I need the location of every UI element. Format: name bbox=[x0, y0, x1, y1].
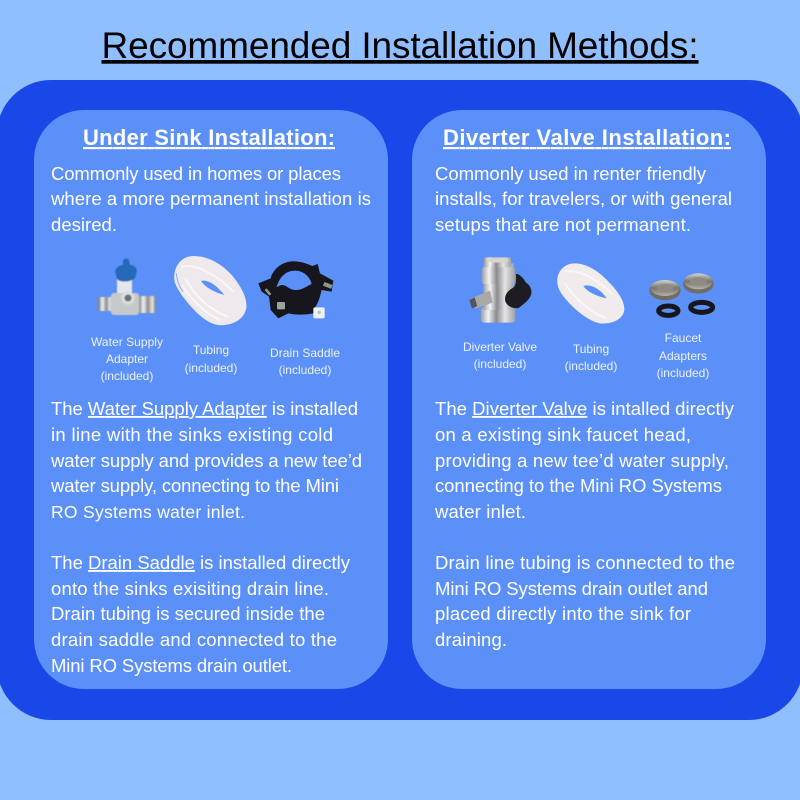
heading: diverter valve: Diverter Valve Installation: bbox=[443, 125, 731, 150]
icon: faucet adapters bbox=[649, 273, 714, 315]
body text: diverter valve: The Diverter Valve is intalled directly bbox=[435, 398, 735, 419]
body text: water supply adapter: The Water Supply Adapter is installed bbox=[51, 398, 358, 419]
body text: water supply adapter: RO Systems water inlet. bbox=[51, 502, 245, 522]
icon: drain saddle bbox=[258, 261, 333, 318]
body text: drain saddle: drain saddle and connected to the bbox=[51, 629, 337, 650]
intro text: under sink bbox=[50, 163, 371, 235]
icon: diverter valve bbox=[469, 257, 531, 323]
captions: diverter parts bbox=[463, 331, 709, 380]
captions: under sink parts: (included) bbox=[185, 361, 237, 375]
body text: water supply adapter bbox=[50, 398, 362, 522]
captions: diverter parts: Adapters bbox=[659, 349, 707, 363]
captions: diverter parts: (included) bbox=[474, 357, 526, 371]
captions: under sink parts: (included) bbox=[279, 363, 331, 377]
captions: diverter parts: (included) bbox=[565, 359, 617, 373]
captions: under sink parts bbox=[91, 335, 340, 383]
body text: drain saddle: onto the sinks exisiting drain line. bbox=[51, 578, 329, 599]
body text: diverter valve: on a existing sink faucet head, bbox=[435, 424, 691, 445]
body text: water supply adapter: in line with the sinks existing cold bbox=[51, 424, 333, 445]
body text: drain line: placed directly into the sink for bbox=[435, 603, 691, 624]
captions: diverter parts: Diverter Valve bbox=[463, 340, 537, 354]
body text: drain line bbox=[435, 552, 735, 650]
body text: drain saddle bbox=[51, 552, 351, 676]
intro text: diverter valve: Commonly used in renter friendly bbox=[435, 163, 707, 184]
captions: under sink parts: Water Supply bbox=[91, 335, 163, 349]
title: Recommended Installation Methods: bbox=[102, 25, 698, 66]
body text: drain line: Drain line tubing is connected to the bbox=[435, 552, 735, 573]
intro text: diverter valve: installs, for travelers, or with general bbox=[435, 188, 732, 209]
captions: under sink parts: Tubing bbox=[193, 343, 229, 357]
captions: diverter parts: Faucet bbox=[665, 331, 702, 345]
icon: water supply adapter bbox=[98, 258, 156, 315]
body text: drain saddle: The Drain Saddle is installed directly bbox=[51, 552, 351, 573]
body text: diverter valve: water inlet. bbox=[434, 501, 526, 522]
intro text: diverter valve bbox=[435, 163, 732, 235]
heading: under sink: Under Sink Installation: bbox=[83, 125, 335, 150]
icon: tubing coil bbox=[557, 263, 624, 323]
body text: drain saddle: Drain tubing is secured inside the bbox=[51, 603, 325, 624]
body text: diverter valve: providing a new tee’d water supply, bbox=[435, 450, 729, 471]
body text: diverter valve: connecting to the Mini RO Systems bbox=[435, 475, 722, 496]
panel: diverter valve installation bbox=[412, 110, 766, 689]
captions: diverter parts: (included) bbox=[657, 366, 709, 380]
outer blue panel bbox=[0, 80, 800, 720]
intro text: under sink: where a more permanent installation is bbox=[50, 188, 371, 209]
intro text: diverter valve: setups that are not permanent. bbox=[435, 214, 691, 235]
captions: diverter parts: Tubing bbox=[573, 342, 609, 356]
captions: under sink parts: Adapter bbox=[106, 352, 148, 366]
body text: water supply adapter: water supply, connecting to the Mini bbox=[50, 475, 339, 496]
captions: under sink parts: Drain Saddle bbox=[270, 346, 340, 360]
intro text: under sink: Commonly used in homes or places bbox=[51, 163, 341, 184]
body text: drain saddle: Mini RO Systems drain outlet. bbox=[51, 655, 292, 676]
panel: under sink installation bbox=[34, 110, 388, 689]
intro text: under sink: desired. bbox=[51, 214, 117, 235]
body text: water supply adapter: water supply and provides a new tee’d bbox=[50, 450, 362, 471]
body text: drain line: Mini RO Systems drain outlet and bbox=[435, 578, 708, 599]
captions: under sink parts: (included) bbox=[101, 369, 153, 383]
icon: tubing coil bbox=[174, 256, 246, 325]
body text: drain line: draining. bbox=[435, 629, 507, 650]
body text: diverter valve bbox=[434, 398, 735, 522]
